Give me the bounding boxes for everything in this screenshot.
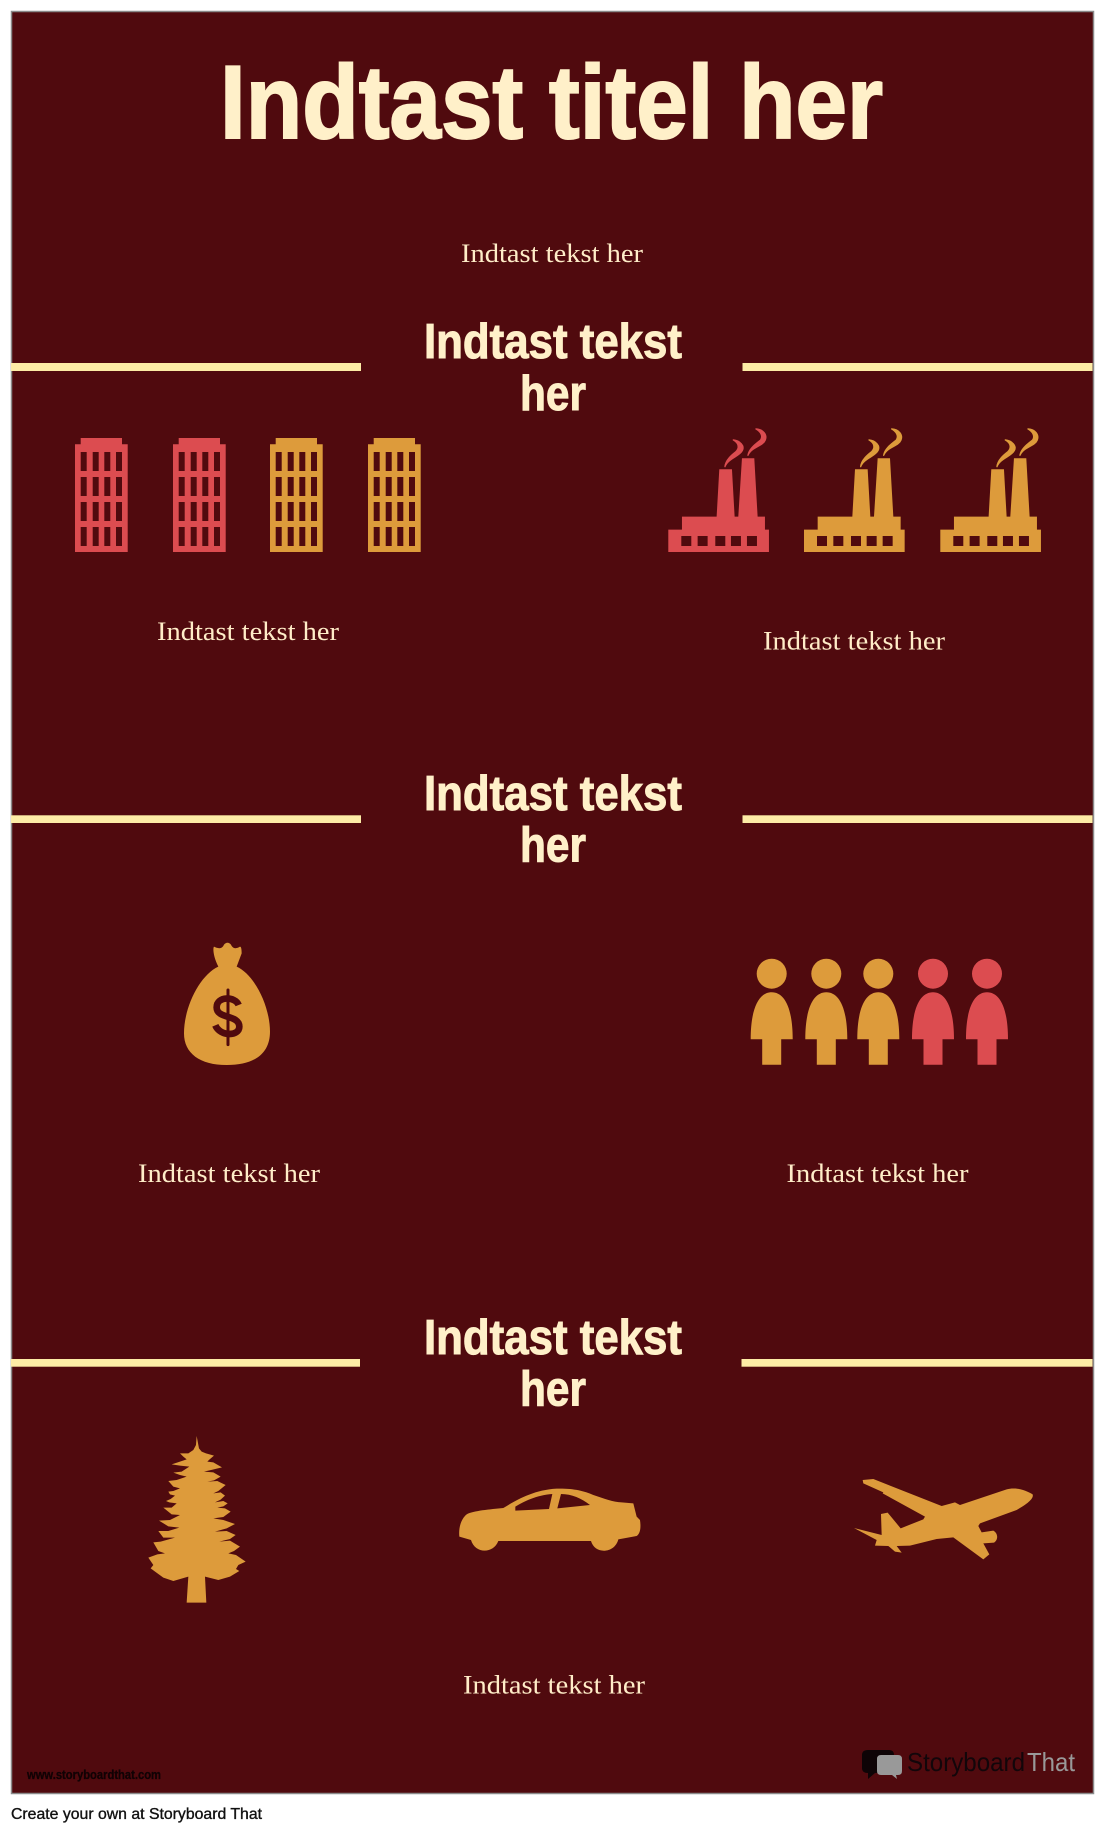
footer credit: Create your own at Storyboard That bbox=[11, 1806, 263, 1823]
icon: airplane bbox=[854, 1479, 1033, 1559]
people caption: Indtast tekst her bbox=[786, 1159, 969, 1188]
section 3 heading: Indtast tekst bbox=[424, 1311, 682, 1365]
section 1 heading bbox=[11, 315, 1092, 421]
icon: five people bbox=[751, 959, 1008, 1065]
icon: three factories bbox=[668, 429, 1041, 552]
icon: car bbox=[459, 1489, 640, 1551]
logo: Storyboard That bbox=[862, 1747, 1076, 1779]
icon: money bag bbox=[184, 943, 270, 1065]
icon: four buildings bbox=[75, 438, 421, 552]
logo: Storyboard That: That bbox=[1027, 1747, 1076, 1777]
watermark url: www.storyboardthat.com bbox=[26, 1767, 161, 1782]
section 1 heading: her bbox=[520, 367, 586, 421]
factories caption: Indtast tekst her bbox=[763, 626, 945, 656]
section 1 heading: Indtast tekst bbox=[424, 315, 682, 369]
section 3 heading: her bbox=[520, 1363, 586, 1417]
transport caption: Indtast tekst her bbox=[463, 1670, 645, 1700]
logo: Storyboard That: Storyboard bbox=[907, 1747, 1025, 1777]
section 3 heading bbox=[11, 1311, 1092, 1417]
buildings caption: Indtast tekst her bbox=[157, 617, 339, 646]
intro text: Indtast tekst her bbox=[461, 239, 643, 268]
title: Indtast titel her bbox=[220, 45, 883, 161]
icon: tree bbox=[148, 1436, 246, 1603]
section 2 heading bbox=[11, 767, 1092, 872]
money caption: Indtast tekst her bbox=[138, 1159, 320, 1188]
section 2 heading: Indtast tekst bbox=[424, 767, 682, 821]
section 2 heading: her bbox=[520, 818, 586, 872]
